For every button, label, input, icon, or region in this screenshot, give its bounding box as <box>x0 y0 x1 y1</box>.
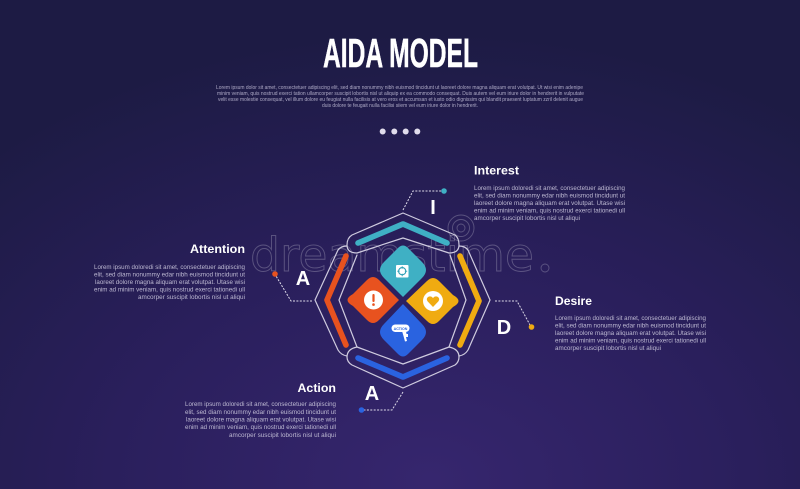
letter D: D <box>497 317 511 339</box>
icon: target <box>396 265 408 278</box>
intro text: duis dolore te feugait nulla facilisi siiem vel eum iriure dolor in hendrerit. <box>322 103 478 109</box>
body text <box>94 264 245 301</box>
body text: laoreet dolore magna aliquam erat volutpat. Utase wisi <box>555 330 706 337</box>
body text <box>185 401 336 439</box>
panel: action <box>185 381 336 439</box>
diamond: attention <box>348 277 399 323</box>
diamond: desire <box>406 278 458 324</box>
panel: interest <box>474 164 625 222</box>
icon: exclamation <box>364 290 383 310</box>
body text: amcorper suscipit lobortis nisl ut aliqui <box>555 345 661 352</box>
body text <box>474 185 625 222</box>
bar: interest <box>358 224 447 243</box>
letter I: I <box>430 197 436 219</box>
band outline: left <box>315 246 357 356</box>
body text: Lorem ipsum doloredi sit amet, consectetuer adipiscing <box>555 315 706 322</box>
intro text: Lorem ipsum dolor sit amet, consectetuer adipiscing elit, sed diam nonummy nibh euismod tincidunt ut laoreet dolore magna aliquam erat volutpat. Ut wisi enim adenipe <box>216 85 583 91</box>
leader: action <box>359 392 403 413</box>
diamond: action <box>380 304 426 356</box>
intro text: minim veniam, quis nostrud exerci tation ullamcorper suscipit lobortis nisl ut aliquip ex ea commodo consequat. Duis autem vel eum iriure dolor in hendrerit in vulputate <box>217 91 584 97</box>
body text: elit, sed diam nonummy edar nibh euismod tincidunt ut <box>555 322 706 330</box>
heading: Attention <box>190 242 245 256</box>
panel: attention <box>94 242 245 301</box>
pagination dots <box>380 128 420 134</box>
body text <box>555 315 706 352</box>
body text: laoreet dolore magna aliquam erat volutpat. Utase wisi <box>95 279 245 286</box>
leader: desire <box>495 301 534 330</box>
title: AIDA MODEL <box>323 30 478 76</box>
body text: Lorem ipsum doloredi sit amet, consectetuer adipiscing <box>185 401 336 408</box>
body text: elit, sed diam nonummy edar nibh euismod tincidunt ut <box>474 192 625 200</box>
body text: elit, sed diam nonummy edar nibh euismod tincidunt ut <box>185 409 336 416</box>
body text: enim ad minim veniam, quis nostrud exerci tationedi ull <box>185 424 336 431</box>
letter A: attention: A <box>296 268 310 290</box>
heading: Action <box>298 381 336 395</box>
intro text: velit esse molestie consequat, vel illum dolore eu feugiat nulla facilisis at vero eros et accumsan et iusto odio dignissim qui blandit praesent luptatum zzril delenit augue <box>218 97 583 103</box>
intro text <box>216 85 584 109</box>
body text: elit, sed diam nonummy edar nibh euismod tincidunt ut <box>94 272 245 278</box>
body text: laoreet dolore magna aliquam erat volutpat. Utase wisi <box>186 416 336 424</box>
bar: desire <box>460 256 479 345</box>
diamond: interest <box>380 246 426 297</box>
bar: attention <box>327 256 346 345</box>
band outline: right <box>449 246 490 356</box>
band outline: bottom <box>347 347 459 388</box>
leader: interest <box>403 188 447 210</box>
body text: enim ad minim veniam, quis nostrud exerci tationedi ull <box>474 208 625 214</box>
body text: amcorper suscipit lobortis nisl ut aliqui <box>229 432 336 439</box>
panel: desire <box>555 294 706 352</box>
letter A: action: A <box>365 383 379 405</box>
body text: Lorem ipsum doloredi sit amet, consectetuer adipiscing <box>474 185 625 192</box>
body text: laoreet dolore magna aliquam erat volutpat. Utase wisi <box>474 200 625 207</box>
heading: Interest <box>474 164 519 178</box>
band outline: top <box>347 213 459 253</box>
heading: Desire <box>555 294 592 308</box>
octagon diagram <box>315 213 490 388</box>
watermark: dreamstime <box>250 228 534 282</box>
icon: action button: ACTION <box>394 327 408 331</box>
body text: Lorem ipsum doloredi sit amet, consectetuer adipiscing <box>94 264 245 271</box>
body text: enim ad minim veniam, quis nostrud exerci tationedi ull <box>555 338 706 344</box>
bar: action <box>358 358 447 377</box>
body text: enim ad minim veniam, quis nostrud exerci tationedi ull <box>94 286 245 294</box>
leader: attention <box>272 271 312 301</box>
body text: amcorper suscipit lobortis nisl ut aliqui <box>474 215 580 222</box>
body text: amcorper suscipit lobortis nisl ut aliqui <box>138 294 245 301</box>
icon: heart <box>423 291 443 311</box>
